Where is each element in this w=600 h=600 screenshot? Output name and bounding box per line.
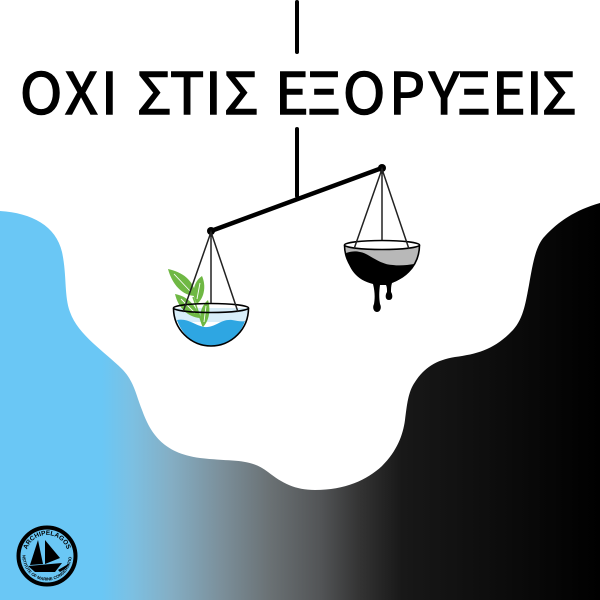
scale: vertical pole	[295, 0, 299, 198]
ring text: top: ARCHIPELAGOS	[24, 530, 71, 550]
icon: right pan with oil and dripping	[344, 169, 420, 312]
icon: bowl water	[177, 320, 245, 346]
icon: oil with drips	[346, 251, 414, 312]
icon: grey bowl fill	[344, 245, 420, 283]
icon: bowl pale water	[174, 308, 248, 322]
pan strings	[183, 232, 238, 312]
background: blue to black gradient landscape	[0, 203, 600, 600]
icon: bowl outline	[344, 245, 420, 283]
icon: left pan with water and plant	[168, 232, 248, 346]
pan strings	[354, 169, 409, 249]
ring text: bottom: INSTITUTE OF MARINE CONSERVATION	[22, 555, 72, 580]
icon: plant leaves	[168, 269, 209, 327]
icon: sailing boat	[28, 540, 70, 572]
scale: tilted beam	[207, 164, 386, 235]
logo: Archipelagos Institute of Marine Conservation	[16, 526, 78, 586]
title: ΟΧΙ ΣΤΙΣ ΕΞΟΡΥΞΕΙΣ	[20, 49, 576, 131]
icon: bowl outline	[174, 308, 248, 346]
